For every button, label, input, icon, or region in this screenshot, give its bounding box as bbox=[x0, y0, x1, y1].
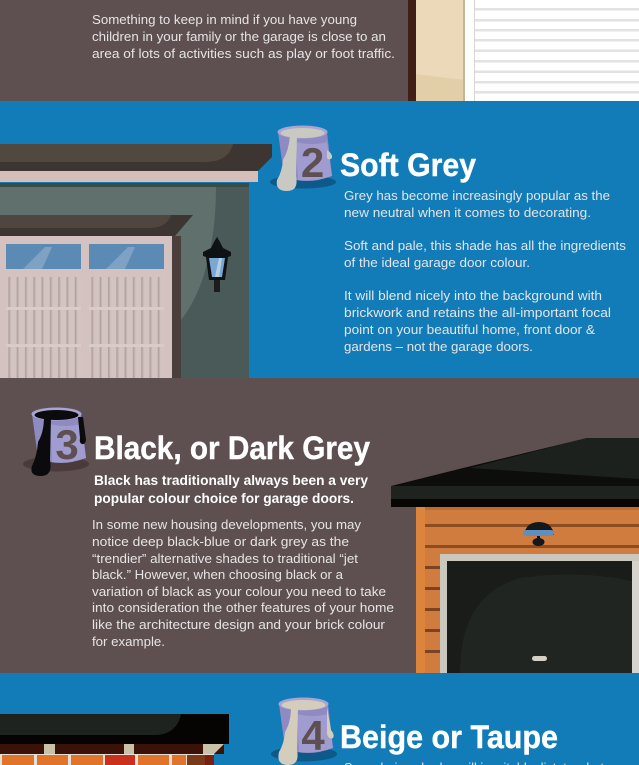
icon: paint can 4 bbox=[271, 698, 337, 765]
text block: section 3 body bbox=[92, 517, 394, 649]
icon: paint can 4: 4 bbox=[301, 712, 325, 759]
panel: section 1 continuation bbox=[0, 0, 639, 101]
text block: section 3 body: notice deep black-blue or dark grey as the bbox=[92, 534, 349, 549]
panel: section 3 black or dark grey bbox=[0, 378, 639, 673]
text block: section 2 body: gardens – not the garage doors. bbox=[344, 339, 533, 354]
icon: paint can 3 bbox=[23, 408, 89, 476]
text block: section 3 subheading bbox=[94, 473, 368, 506]
icon: paint can 2: 2 bbox=[301, 139, 324, 186]
text block: section 1 body: children in your family or the garage is close to an bbox=[92, 29, 386, 44]
text block: section 2 body: new neutral when it comes to decorating. bbox=[344, 205, 591, 220]
icon: paint can 2 bbox=[270, 126, 336, 191]
text block: section 2 body: Grey has become increasingly popular as the bbox=[344, 188, 610, 203]
icon: black garage lamp bbox=[523, 522, 554, 546]
icon: wall lantern bbox=[203, 237, 231, 292]
text block: section 3 body: In some new housing developments, you may bbox=[92, 517, 362, 532]
illustration: soft grey garage bbox=[0, 144, 272, 378]
text block: section 3 subheading: popular colour choice for garage doors. bbox=[94, 491, 354, 506]
text block: section 2 body: point on your beautiful home, front door & bbox=[344, 322, 595, 337]
heading: soft grey: Soft Grey bbox=[340, 147, 476, 183]
text block: section 3 body: like the architecture design and your brick colour bbox=[92, 617, 386, 632]
panel: section 2 soft grey bbox=[0, 101, 639, 378]
text block: section 1 body bbox=[92, 12, 395, 61]
panel: section 4 beige or taupe bbox=[0, 673, 639, 765]
text block: section 3 subheading: Black has traditionally always been a very bbox=[94, 473, 368, 488]
text block: section 2 body: of the ideal garage door colour. bbox=[344, 255, 530, 270]
heading: beige or taupe: Beige or Taupe bbox=[340, 719, 558, 755]
heading: black or dark grey: Black, or Dark Grey bbox=[94, 430, 370, 466]
text block: section 1 body: Something to keep in mind if you have young bbox=[92, 12, 357, 27]
icon: paint can 3: 3 bbox=[55, 421, 79, 468]
text block: section 3 body: into consideration the other features of your home bbox=[92, 600, 394, 615]
text block: section 3 body: black.” However, when choosing black or a bbox=[92, 567, 344, 582]
illustration: brick garage bbox=[0, 714, 229, 765]
illustration: white garage door bbox=[408, 0, 639, 101]
text block: section 2 body: brickwork and retains the all-important focal bbox=[344, 305, 611, 320]
text block: section 2 body: It will blend nicely into the background with bbox=[344, 288, 602, 303]
illustration: black garage door bbox=[391, 438, 639, 673]
text block: section 3 body: variation of black as your colour you need to take bbox=[92, 584, 386, 599]
text block: section 3 body: for example. bbox=[92, 634, 165, 649]
text block: section 2 body: Soft and pale, this shade has all the ingredients bbox=[344, 238, 627, 253]
text block: section 1 body: area of lots of activities such as play or foot traffic. bbox=[92, 46, 395, 61]
text block: section 2 body bbox=[344, 188, 627, 354]
text block: section 3 body: “trendier” alternative shades to traditional “jet bbox=[92, 551, 358, 566]
